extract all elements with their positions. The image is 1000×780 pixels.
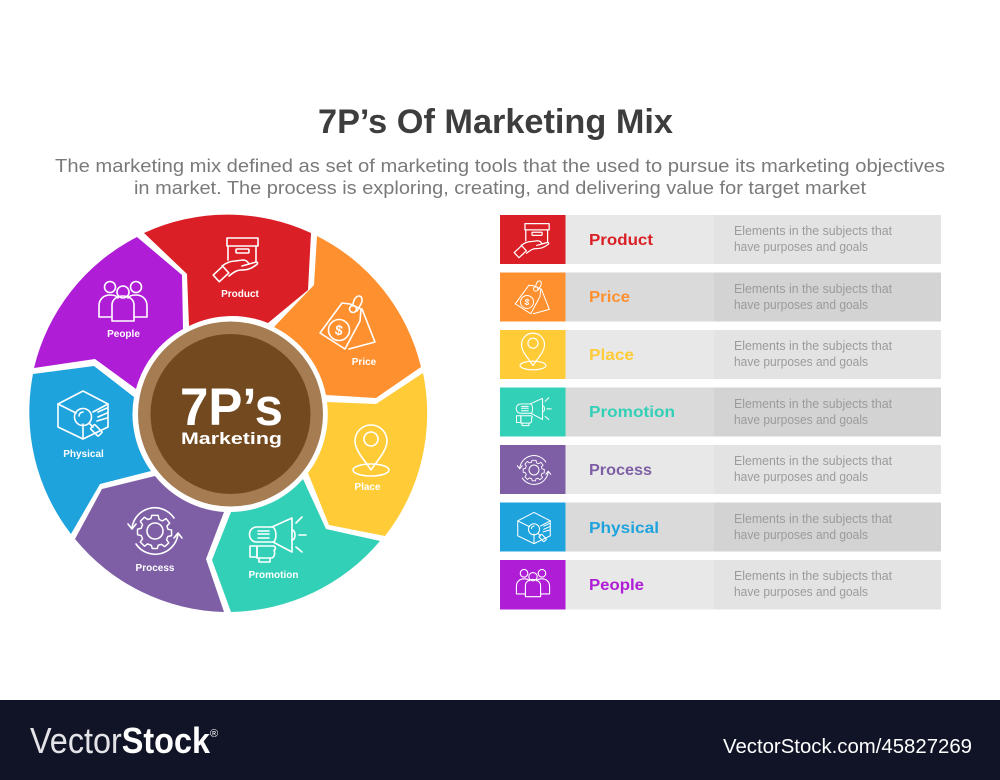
description [734, 568, 892, 599]
icon: location pin [353, 425, 389, 476]
subtitle text block: in market. The process is exploring, creating, and delivering value for target market [134, 177, 866, 198]
icon: box with magnifier [518, 512, 550, 544]
description: have purposes and goals [734, 354, 868, 369]
legend list [500, 215, 941, 610]
panel: process segment [75, 476, 224, 612]
label: Price [589, 289, 630, 306]
wheel diagram [29, 215, 427, 612]
people label: People [107, 329, 140, 340]
row: physical [500, 502, 941, 552]
title: 7P’s Of Marketing Mix [318, 103, 673, 141]
row: people [500, 560, 941, 610]
panel: product segment [144, 215, 311, 326]
panel: people segment [34, 237, 183, 389]
icon: product [213, 238, 258, 282]
description: have purposes and goals [734, 239, 868, 254]
label: Physical [589, 520, 659, 537]
price label: Price [352, 357, 377, 368]
icon: gear [517, 456, 551, 484]
description: have purposes and goals [734, 584, 868, 599]
physical label: Physical [63, 449, 104, 460]
icon: location pin [520, 333, 546, 370]
registered mark: ® [210, 728, 218, 740]
icon: gear [128, 508, 182, 554]
footer id: VectorStock.com/45827269 [723, 736, 972, 758]
center circle [134, 317, 328, 511]
row: promotion [500, 388, 941, 436]
center heading: 7P’s [180, 378, 283, 437]
panel: place segment [308, 373, 427, 536]
description [734, 396, 892, 427]
panel: promotion segment [212, 479, 380, 612]
description: Elements in the subjects that [734, 511, 892, 526]
footer logo: VectorStock [30, 720, 211, 761]
description: Elements in the subjects that [734, 338, 892, 353]
row: process [500, 445, 941, 494]
description [734, 511, 892, 542]
description: Elements in the subjects that [734, 281, 892, 296]
description: Elements in the subjects that [734, 223, 892, 238]
icon: people [516, 569, 550, 597]
description: have purposes and goals [734, 412, 868, 427]
description: Elements in the subjects that [734, 396, 892, 411]
description [734, 223, 892, 254]
icon: megaphone [250, 517, 306, 562]
description: have purposes and goals [734, 297, 868, 312]
icon: megaphone [516, 398, 551, 426]
row: product [500, 215, 941, 264]
center subheading: Marketing [181, 429, 282, 448]
description: have purposes and goals [734, 469, 868, 484]
icon: price tag [320, 296, 375, 349]
subtitle text block: The marketing mix defined as set of marketing tools that the used to pursue its marketing objectives [55, 155, 945, 176]
description [734, 453, 892, 484]
panel: price segment [274, 236, 421, 398]
promotion label: Promotion [248, 570, 298, 581]
product label: Product [221, 289, 260, 300]
icon: people [99, 282, 147, 321]
row: price [500, 272, 941, 322]
icon: product [514, 224, 549, 258]
description: have purposes and goals [734, 527, 868, 542]
subtitle text block [55, 155, 945, 198]
description [734, 338, 892, 369]
icon: price tag [515, 281, 549, 314]
description: Elements in the subjects that [734, 453, 892, 468]
row: place [500, 330, 941, 379]
label: People [589, 577, 644, 594]
panel: physical segment [29, 366, 151, 534]
footer bar [0, 700, 1000, 780]
label: Promotion [589, 404, 675, 421]
label: Process [589, 462, 652, 479]
label: Place [589, 347, 634, 364]
process label: Process [136, 563, 175, 574]
icon: box with magnifier [58, 391, 108, 439]
label: Product [589, 232, 654, 249]
description [734, 281, 892, 312]
description: Elements in the subjects that [734, 568, 892, 583]
place label: Place [354, 482, 381, 493]
